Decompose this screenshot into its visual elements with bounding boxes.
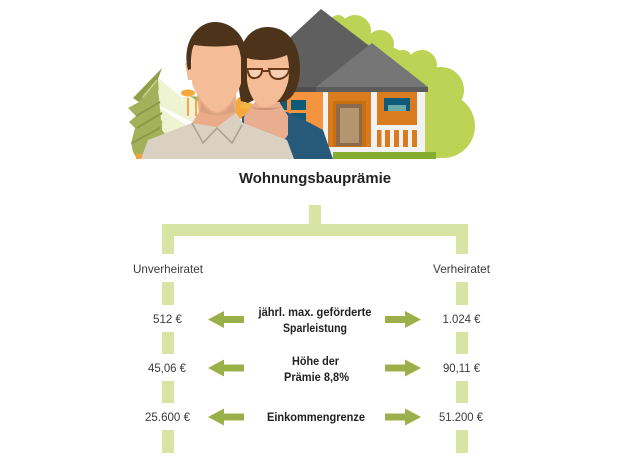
illustration: couple, house and money: [128, 9, 475, 159]
column heading: Unverheiratet: [133, 262, 204, 276]
arrow: left row 3: [208, 408, 244, 426]
label: Einkommengrenze: Einkommengrenze: [267, 412, 365, 424]
column: verheiratet: [433, 262, 491, 453]
column: unverheiratet: [133, 262, 204, 453]
label: jährl. max. geförderte Sparleistung: jährl. max. geförderte: [258, 307, 372, 319]
icon: house: [250, 9, 436, 159]
value: 512 euro: 512 €: [153, 314, 183, 326]
value: 25.600 euro: 25.600 €: [145, 412, 191, 424]
value: 1.024 euro: 1.024 €: [442, 314, 481, 326]
icon: coins: [181, 90, 254, 120]
label: Höhe der Prämie 8,8%: [284, 356, 349, 384]
arrow: left row 2: [208, 360, 244, 376]
label: jährl. max. geförderte Sparleistung: [258, 307, 372, 335]
value: 45,06 euro: 45,06 €: [148, 363, 187, 375]
column heading: Verheiratet: [433, 262, 491, 276]
arrow: right row 2: [385, 360, 421, 376]
connector segments: [162, 282, 174, 453]
value: 90,11 euro: 90,11 €: [443, 363, 481, 375]
arrow: right row 3: [385, 408, 421, 426]
arrow: right row 1: [385, 311, 421, 328]
icon: bush: [330, 15, 475, 158]
label: jährl. max. geförderte Sparleistung: Sparleistung: [283, 323, 347, 335]
label: Höhe der Prämie 8,8%: Prämie 8,8%: [284, 372, 349, 384]
connector segments: [456, 282, 468, 453]
icon: man: [141, 22, 294, 159]
label: Höhe der Prämie 8,8%: Höhe der: [292, 356, 339, 368]
value: 51.200 euro: 51.200 €: [439, 412, 484, 424]
icon: woman: [239, 27, 333, 159]
title: Wohnungsbauprämie: [239, 170, 391, 187]
arrow: left row 1: [208, 311, 244, 328]
icon: money stacks: [128, 68, 196, 159]
bracket connector: [162, 205, 468, 254]
